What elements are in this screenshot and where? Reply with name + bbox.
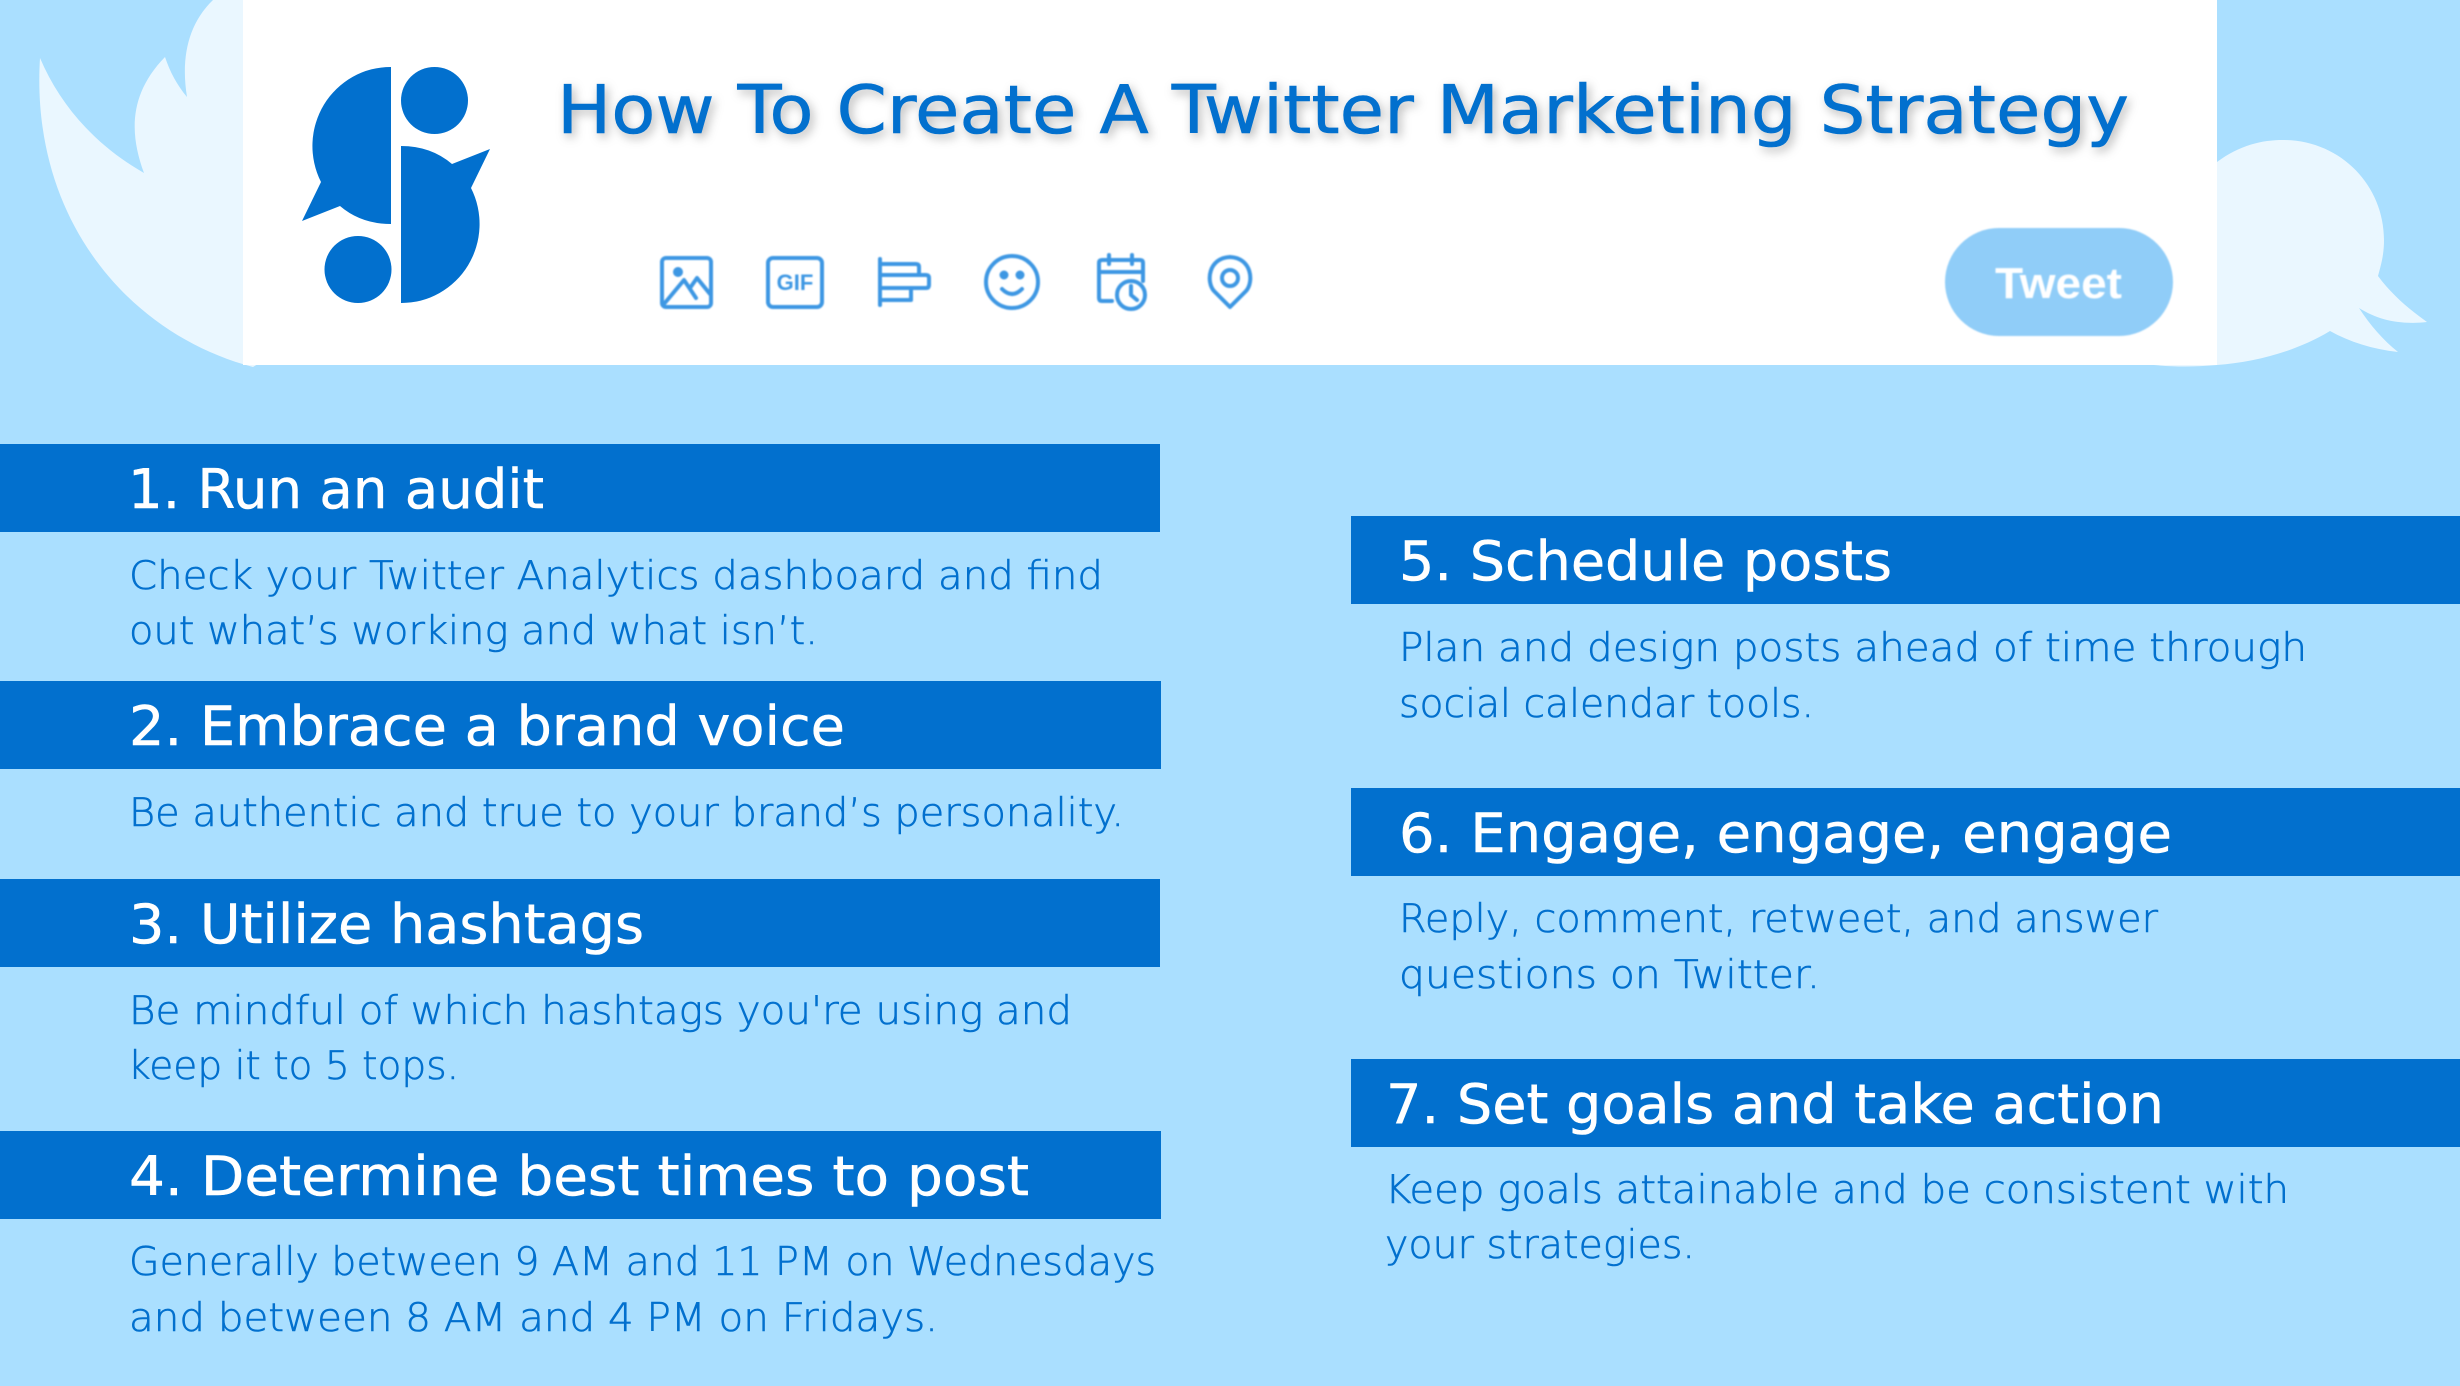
body: step 4: and between 8 AM and 4 PM on Fridays.: [129, 1296, 938, 1341]
tweet button: Tweet: [1995, 259, 2122, 308]
heading: step 4: 4. Determine best times to post: [129, 1145, 1029, 1208]
panel: step 6: [1351, 788, 2460, 998]
body: step 3: Be mindful of which hashtags you're using and: [129, 989, 1072, 1034]
panel: step 3: [0, 879, 1160, 1089]
heading: step 7: 7. Set goals and take action: [1386, 1073, 2164, 1136]
logo: [302, 67, 490, 303]
body: step 5: social calendar tools.: [1399, 682, 1814, 727]
body: step 1: out what’s working and what isn’t.: [129, 609, 818, 654]
icon: gif: [768, 258, 822, 307]
panel: step 1: [0, 444, 1160, 654]
icon: bird wing background: [39, 0, 258, 367]
panel: step 5: [1351, 516, 2460, 727]
panel: step 7: [1351, 1059, 2460, 1268]
panel: step 4: [0, 1131, 1161, 1341]
tweet button: [1945, 228, 2173, 336]
heading: step 6: 6. Engage, engage, engage: [1399, 802, 2172, 865]
heading: step 1: 1. Run an audit: [128, 458, 544, 521]
body: step 7: Keep goals attainable and be consistent with: [1385, 1168, 2289, 1213]
body: step 4: Generally between 9 AM and 11 PM on Wednesdays: [129, 1240, 1156, 1285]
body: step 5: Plan and design posts ahead of time through: [1399, 626, 2307, 671]
body: step 2: Be authentic and true to your brand’s personality.: [129, 791, 1124, 836]
icon: schedule calendar: [1099, 255, 1145, 309]
icon: location pin: [1210, 257, 1250, 307]
title: How To Create A Twitter Marketing Strategy: [557, 71, 2129, 149]
heading: step 3: 3. Utilize hashtags: [129, 893, 644, 956]
icon: speech bubble background: [2154, 140, 2427, 366]
body: step 1: Check your Twitter Analytics dashboard and find: [129, 554, 1103, 599]
icon: smiley: [986, 256, 1038, 308]
body: step 6: questions on Twitter.: [1399, 953, 1820, 998]
panel: step 2: [0, 681, 1161, 836]
icon: image: [662, 258, 711, 307]
body: step 7: your strategies.: [1385, 1223, 1695, 1268]
panel: tweet composer header: [243, 0, 2217, 365]
heading: step 2: 2. Embrace a brand voice: [129, 695, 845, 758]
heading: step 5: 5. Schedule posts: [1399, 530, 1892, 593]
body: step 3: keep it to 5 tops.: [128, 1044, 459, 1089]
icon: poll: [880, 259, 929, 305]
body: step 6: Reply, comment, retweet, and answer: [1399, 897, 2158, 942]
icon: gif: GIF: [777, 270, 813, 295]
